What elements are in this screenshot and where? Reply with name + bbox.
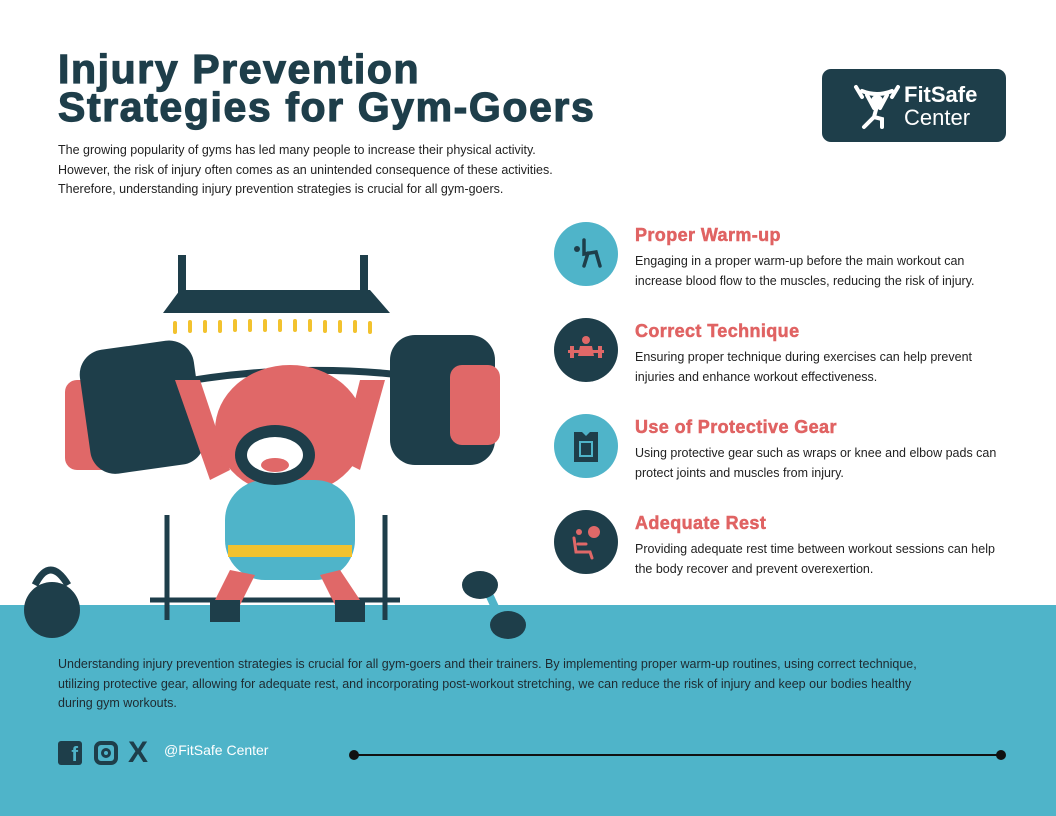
intro text: The growing popularity of gyms has led many people to increase their physical activity. However, the risk of injury often comes as an unintended consequence of these activities. Therefore, understanding injury prevention strategies is crucial for all gym-goers. xyxy=(58,143,553,196)
item: rest: Adequate Rest xyxy=(635,513,766,533)
social icons: f xyxy=(71,744,78,766)
item: warm-up xyxy=(554,222,975,288)
logo: Center xyxy=(904,105,970,130)
kettlebell xyxy=(24,570,80,638)
logo xyxy=(822,69,1006,142)
item: technique xyxy=(554,318,972,384)
item: protective gear: Use of Protective Gear xyxy=(635,417,837,437)
logo: FitSafe xyxy=(904,82,977,107)
title xyxy=(58,46,595,130)
icon: vest xyxy=(554,414,618,478)
barbell xyxy=(65,335,500,477)
item: warm-up: Proper Warm-up xyxy=(635,225,781,245)
social icons: X xyxy=(128,736,148,769)
icon: technique xyxy=(554,318,618,382)
item: protective gear: Using protective gear such as wraps or knee and elbow pads can protect joints and muscles from injury. xyxy=(635,446,996,480)
item: technique: Correct Technique xyxy=(635,321,800,341)
light rays xyxy=(175,321,370,332)
timeline line xyxy=(349,750,1006,760)
illustration: weightlifter xyxy=(24,255,526,639)
item: technique: Ensuring proper technique during exercises can help prevent injuries and enhance workout effectiveness. xyxy=(635,350,972,384)
item: rest: Providing adequate rest time between workout sessions can help the body recover and prevent overexertion. xyxy=(635,542,995,576)
body xyxy=(175,365,385,622)
social icons: @FitSafe Center xyxy=(164,742,268,758)
title: Injury Prevention xyxy=(58,46,420,92)
item: warm-up: Engaging in a proper warm-up before the main workout can increase blood flow to the muscles, reducing the risk of injury. xyxy=(635,254,975,288)
item: rest xyxy=(554,510,995,576)
dumbbell xyxy=(462,571,526,639)
social icons xyxy=(58,736,268,769)
icon: warm-up xyxy=(554,222,618,286)
item: protective gear xyxy=(554,414,996,480)
rack xyxy=(150,515,400,620)
footer band xyxy=(0,605,1056,816)
icon: rest xyxy=(554,510,618,574)
title: Strategies for Gym-Goers xyxy=(58,84,595,130)
ceiling lamp xyxy=(163,255,390,313)
conclusion text: Understanding injury prevention strategies is crucial for all gym-goers and their trainers. By implementing proper warm-up routines, using correct technique, utilizing protective gear, allowing for adequate rest, and incorporating post-workout stretching, we can reduce the risk of injury and keep our bodies healthy during gym workouts. xyxy=(58,657,917,710)
